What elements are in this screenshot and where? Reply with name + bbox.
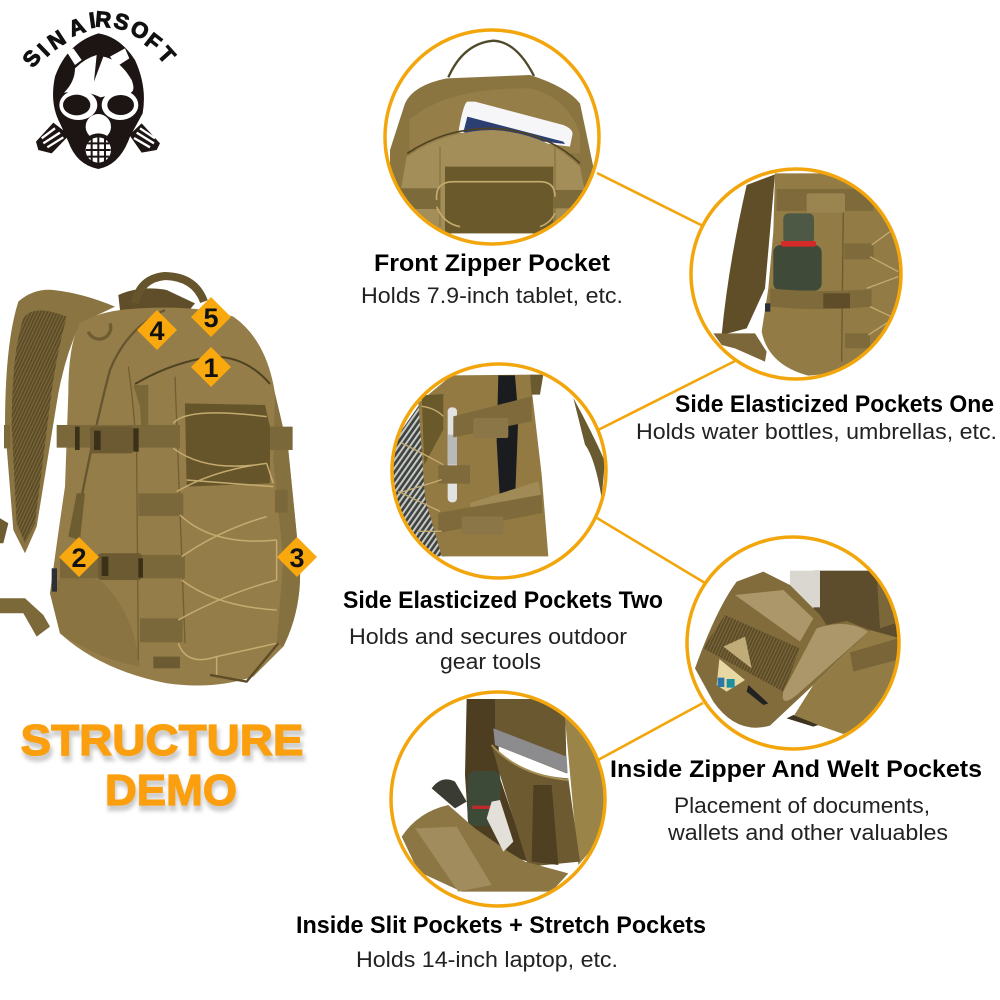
numbered badge 2: 2 <box>71 543 87 573</box>
logo wordmark <box>17 6 181 72</box>
logo: gas mask skull <box>17 6 181 169</box>
text: gear tools: gear tools <box>440 649 541 674</box>
text: laptop: Holds 14-inch laptop, etc. <box>356 947 618 972</box>
title: structure demo: STRUCTURE <box>20 716 303 765</box>
text: water bottles: Holds water bottles, umbrellas, etc. <box>636 419 997 444</box>
logo wordmark: N <box>43 25 70 55</box>
logo wordmark: A <box>65 12 89 41</box>
panel: side pockets two photo <box>392 364 606 578</box>
numbered badge 2 <box>59 537 99 577</box>
connector lines <box>597 173 735 760</box>
heading: inside slit pockets: Inside Slit Pockets + Stretch Pockets <box>296 912 706 939</box>
logo wordmark: R <box>94 6 112 33</box>
title: structure demo: STRUCTURE <box>22 721 305 770</box>
text: tablet: Holds 7.9-inch tablet, etc. <box>361 283 623 308</box>
logo wordmark: O <box>126 15 153 45</box>
numbered badge 1: 1 <box>203 353 219 383</box>
backpack main image <box>0 276 317 686</box>
text: outdoor gear: Holds and secures outdoor <box>349 624 627 649</box>
text: wallets: wallets and other valuables <box>667 820 948 845</box>
panel: inside zipper pockets photo <box>687 537 900 749</box>
heading: side pockets one: Side Elasticized Pockets One <box>675 391 994 418</box>
panel: inside slit pockets photo <box>391 692 608 906</box>
title: structure demo: DEMO <box>105 766 237 815</box>
panel: side pockets one photo <box>691 169 902 379</box>
heading: front zipper pocket: Front Zipper Pocket <box>374 250 610 277</box>
logo wordmark: T <box>153 42 181 69</box>
logo wordmark: S <box>17 45 46 72</box>
numbered badge 3 <box>277 537 317 577</box>
numbered badge 4: 4 <box>149 316 165 346</box>
logo wordmark: F <box>140 28 166 56</box>
numbered badge 4 <box>137 310 177 350</box>
numbered badge 1 <box>191 347 231 387</box>
heading: inside zipper pockets: Inside Zipper And Welt Pockets <box>610 756 982 783</box>
panel: front zipper pocket photo <box>385 30 600 244</box>
title: structure demo <box>20 716 305 820</box>
logo wordmark: I <box>88 7 97 33</box>
text: documents: Placement of documents, <box>674 793 930 818</box>
numbered badge 3: 3 <box>289 543 305 573</box>
logo wordmark: S <box>111 8 132 36</box>
heading: side pockets two: Side Elasticized Pockets Two <box>343 587 663 614</box>
title: structure demo: DEMO <box>106 771 238 820</box>
numbered badge 5: 5 <box>203 303 219 333</box>
logo wordmark: I <box>33 39 54 61</box>
numbered badge 5 <box>191 297 231 337</box>
